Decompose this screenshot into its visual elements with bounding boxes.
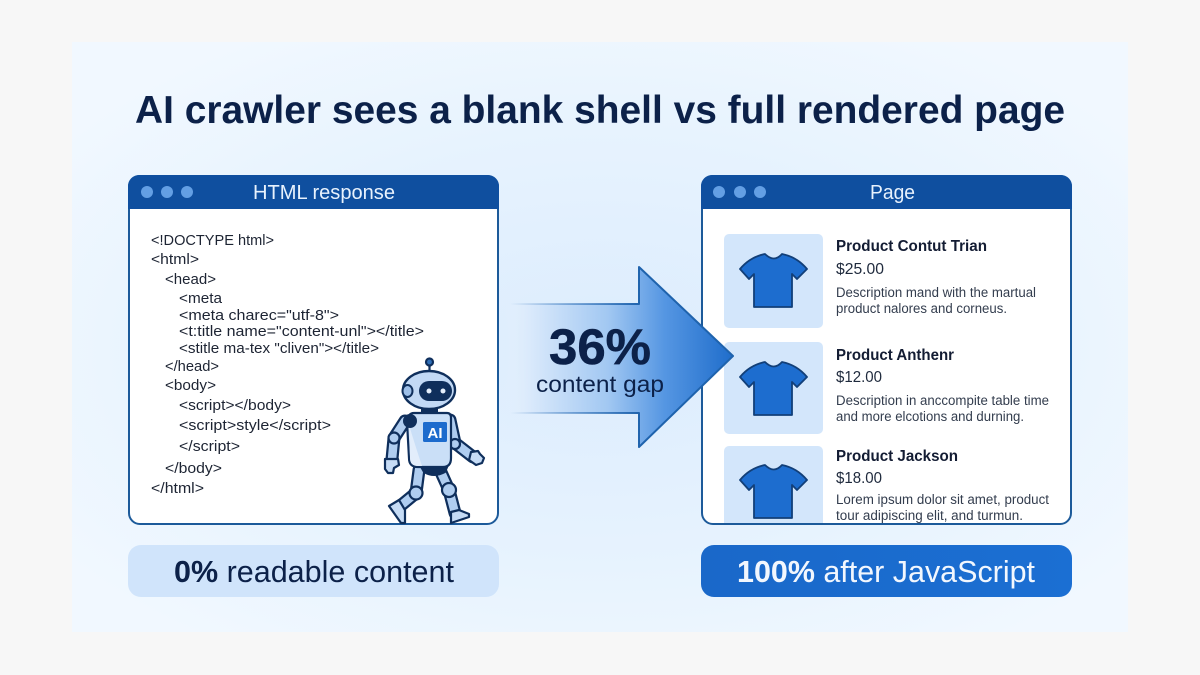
product 1 — [724, 234, 1036, 328]
robot antenna — [426, 358, 433, 372]
code listing: <!DOCTYPE html> — [151, 232, 274, 249]
code listing: </html> — [151, 480, 204, 497]
robot limb fills — [392, 420, 473, 513]
code listing: <stitle ma-tex "cliven"></title> — [179, 340, 379, 357]
window header bar — [701, 175, 1072, 209]
code listing: </body> — [165, 460, 222, 477]
panel: HTML response — [128, 175, 499, 524]
code listing: <html> — [151, 251, 199, 268]
code listing: <body> — [165, 377, 216, 394]
product 2 description — [836, 393, 1049, 424]
callout: 100% after JavaScript — [701, 545, 1072, 597]
window header bar — [128, 175, 499, 209]
robot head — [403, 371, 455, 409]
product image 1 — [724, 234, 823, 328]
product 1 description: product nalores and corneus. — [836, 301, 1007, 316]
callout: 0% readable content — [128, 545, 499, 597]
product 1 name: Product Contut Trian — [836, 238, 987, 255]
title: AI crawler sees a blank shell vs full rendered page — [135, 89, 1065, 132]
code listing: <meta charec="utf-8"> — [179, 307, 339, 324]
product 3 name: Product Jackson — [836, 448, 958, 465]
robot limb outlines — [392, 420, 473, 513]
code listing: <script></body> — [179, 397, 291, 414]
header label: HTML response — [253, 182, 395, 204]
product image 3 — [724, 446, 823, 523]
code listing: <meta — [179, 290, 223, 307]
window dots — [141, 186, 193, 198]
robot ear — [402, 385, 412, 397]
robot AI badge — [423, 422, 447, 442]
product 1 price: $25.00 — [836, 261, 884, 278]
product 3 price: $18.00 — [836, 470, 882, 487]
callout: 0% readable content: 0% readable content — [174, 554, 454, 589]
callout: 100% after JavaScript: 100% after JavaScript — [737, 554, 1035, 589]
product 2 description: and more elcotions and durning. — [836, 409, 1024, 424]
robot torso highlight — [409, 425, 422, 466]
robot hips — [420, 465, 448, 475]
icon: AI robot — [385, 358, 484, 523]
header label: Page — [870, 182, 915, 204]
product 1 description: Description mand with the martual — [836, 285, 1036, 300]
robot AI badge: AI — [428, 425, 442, 442]
panel: rendered page — [701, 175, 1072, 536]
product 1 description — [836, 285, 1036, 316]
code listing: <head> — [165, 271, 216, 288]
background panel — [72, 42, 1128, 632]
product 2 price: $12.00 — [836, 369, 882, 386]
product 3 — [724, 446, 1049, 523]
code listing: <t:title name="content-unl"></title> — [179, 323, 424, 340]
code listing — [151, 232, 424, 497]
robot visor — [419, 381, 452, 401]
label: content gap: content gap — [536, 371, 664, 397]
code listing: </script> — [179, 438, 240, 455]
robot joints, hands and feet — [385, 432, 484, 523]
product image 2 — [724, 342, 823, 434]
product 3 description: Lorem ipsum dolor sit amet, product — [836, 492, 1049, 507]
product 3 description — [836, 492, 1049, 523]
product 3 description: tour adipiscing elit, and turmun. — [836, 508, 1023, 523]
robot shoulder — [403, 414, 417, 428]
robot eyes — [426, 388, 446, 394]
code listing: <script>style</script> — [179, 417, 331, 434]
product 2 description: Description in anccompite table time — [836, 393, 1049, 408]
arrow: content gap — [505, 267, 733, 447]
product 2 name: Product Anthenr — [836, 347, 954, 364]
code listing: </head> — [165, 358, 219, 375]
robot neck — [421, 407, 438, 413]
window dots — [713, 186, 766, 198]
product 2 — [724, 342, 1049, 434]
stat: 36%: 36% — [549, 319, 651, 375]
robot torso — [407, 413, 451, 467]
